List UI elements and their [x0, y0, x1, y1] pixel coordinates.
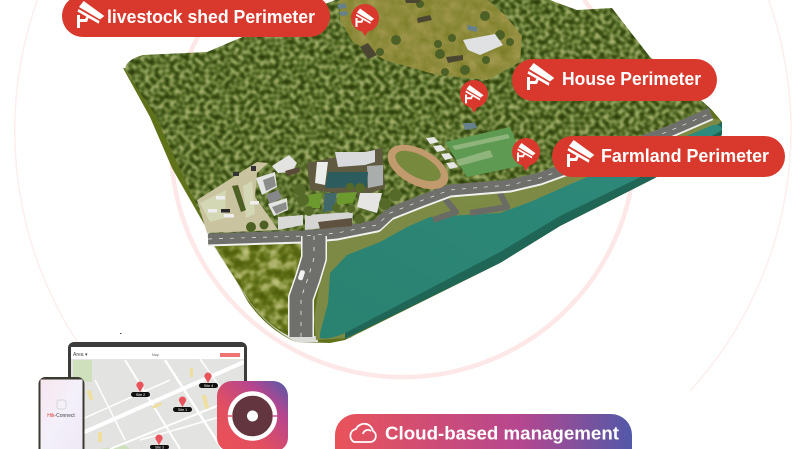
icon: cloud	[350, 424, 376, 442]
water	[320, 125, 722, 338]
tablet header: Area ▾	[73, 352, 88, 358]
ring	[230, 394, 275, 438]
label text: livestock shed Perimeter	[107, 7, 315, 27]
pasture clearing	[340, 0, 522, 80]
car	[298, 270, 305, 281]
left row buildings	[256, 172, 288, 216]
parking bays	[200, 181, 255, 222]
site pin: Site 4	[199, 373, 218, 388]
marker: house camera	[460, 80, 488, 113]
button text: Cloud-based management	[385, 424, 619, 444]
forest	[115, 0, 725, 240]
app icon	[217, 381, 288, 449]
ring notches	[227, 415, 233, 417]
parking trees and cars	[208, 166, 268, 232]
map	[71, 359, 244, 449]
pasture trees	[376, 0, 514, 76]
central complex base	[307, 148, 385, 196]
site pin: Site 1: Site 1	[178, 408, 187, 412]
label text: House Perimeter	[562, 69, 701, 89]
phone logo	[57, 400, 66, 409]
pale slab edge	[207, 236, 318, 342]
icon: camera	[77, 1, 104, 28]
site pin: Site 3	[150, 435, 169, 449]
tablet header	[71, 347, 244, 359]
cloud-based management button	[335, 414, 632, 449]
main white building	[335, 150, 375, 167]
track infield	[391, 145, 445, 187]
side wing	[367, 165, 383, 188]
central pool	[325, 172, 368, 188]
white barn	[463, 34, 503, 55]
race track	[380, 136, 456, 198]
phone screen	[40, 380, 82, 449]
speck	[120, 333, 122, 334]
south road	[301, 236, 314, 337]
dock lawn	[457, 193, 495, 205]
campus trees	[294, 183, 401, 224]
terrain slab side	[123, 68, 722, 343]
tablet	[68, 342, 247, 449]
docks	[433, 193, 507, 220]
northern villa	[272, 155, 297, 173]
marker: farmland camera	[512, 138, 540, 171]
label: livestock shed perimeter	[62, 0, 330, 37]
courts	[307, 192, 357, 208]
tablet header: Map	[152, 353, 159, 357]
label: house perimeter	[512, 59, 717, 101]
site pin: Site 1	[173, 397, 192, 412]
site pin: Site 2	[131, 382, 150, 397]
icon: camera	[527, 63, 554, 90]
villa base	[285, 167, 300, 176]
lower pool	[323, 193, 337, 212]
icon: camera	[567, 140, 594, 167]
blue roof sheds	[337, 3, 477, 130]
site pin: Site 4: Site 4	[204, 384, 213, 388]
farmland strips	[452, 134, 510, 166]
right building	[357, 193, 382, 213]
bank	[314, 117, 722, 340]
label text: Farmland Perimeter	[601, 146, 769, 166]
site pin: Site 2: Site 2	[136, 393, 145, 397]
stables	[426, 137, 458, 169]
label: farmland perimeter	[552, 136, 785, 177]
farmland	[445, 127, 525, 177]
marker: livestock camera	[351, 4, 379, 36]
white roof hall	[315, 162, 328, 185]
water side	[345, 122, 722, 339]
south buildings	[278, 212, 353, 230]
center dot	[247, 410, 258, 422]
parking lot	[197, 162, 278, 233]
main road	[208, 113, 711, 241]
lower forest	[214, 244, 301, 334]
phone	[38, 377, 84, 449]
dark barns	[360, 0, 463, 63]
app name: Hik-Connect	[47, 413, 75, 419]
aerial site model	[115, 0, 725, 343]
